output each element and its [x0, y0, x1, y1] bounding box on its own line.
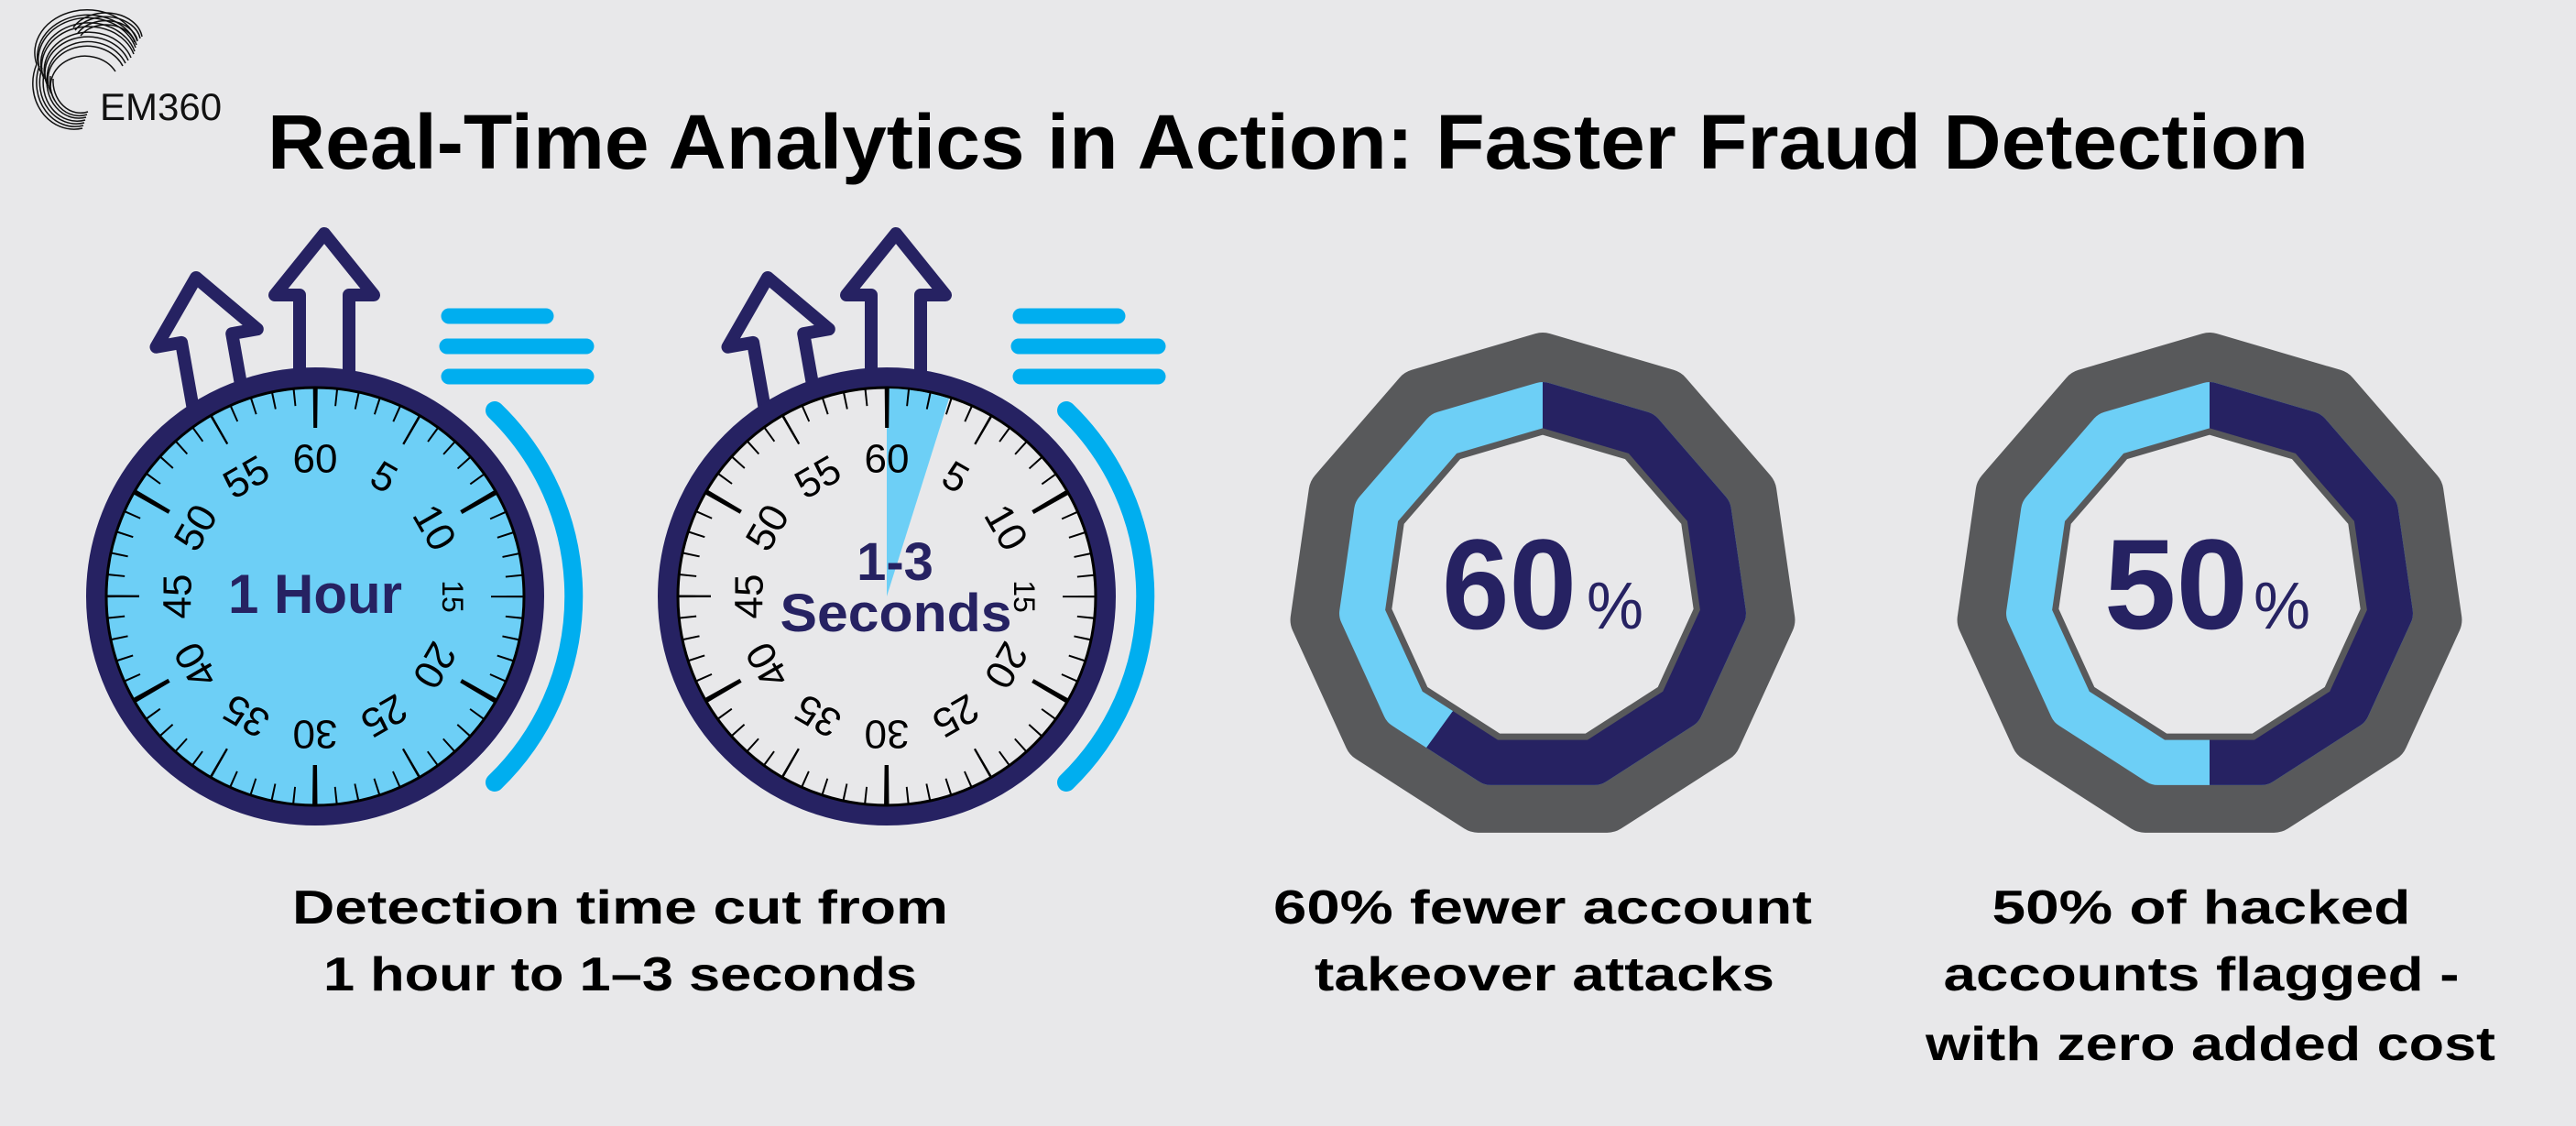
value: 50%: % [2254, 570, 2310, 643]
stopwatch: 1-3 seconds: 50 [737, 497, 799, 558]
icon: arrows [146, 234, 374, 435]
chart: 50% ring [1983, 358, 2436, 807]
label: 1-3 Seconds [780, 532, 1011, 643]
stopwatch: 1-3 seconds: 20 [975, 635, 1036, 695]
caption: detection time: Detection time cut from [292, 881, 948, 935]
stopwatch: 1-3 seconds: 35 [788, 684, 848, 746]
icon: speed lines [1019, 316, 1158, 782]
stopwatch: 1 hour: 25 [354, 684, 414, 746]
stopwatch: 1 hour: 10 [403, 497, 464, 558]
stopwatch: 1 hour: 60 [293, 436, 337, 482]
logo: EM360: EM360 [100, 85, 222, 128]
caption: 50% flagged [1925, 881, 2495, 1071]
stopwatch: 1-3 seconds: 60 [865, 436, 909, 482]
caption: detection time: 1 hour to 1–3 seconds [323, 948, 917, 1001]
stopwatch: 1 hour [96, 234, 586, 815]
chart: 60% ring [1316, 358, 1769, 807]
stopwatch: 1 hour: 50 [166, 497, 227, 558]
stopwatch: 1 hour: 40 [166, 635, 227, 695]
value: 50%: 50 [2104, 512, 2248, 656]
title: Real-Time Analytics in Action: Faster Fraud Detection [267, 99, 2309, 185]
logo: EM360 [33, 10, 222, 129]
caption: 60% fewer [1273, 881, 1812, 1001]
stopwatch: 1 hour: 5 [363, 453, 405, 502]
stopwatch: 1 hour: 30 [293, 711, 337, 757]
stopwatch: 1-3 seconds: 40 [737, 635, 799, 695]
value: 60%: % [1587, 570, 1643, 643]
stopwatch: 1 hour: 45 [156, 574, 200, 618]
stopwatch: 1 hour: 15 [436, 580, 469, 613]
icon: arrows [717, 234, 945, 435]
stopwatch: 1-3 seconds: 25 [925, 684, 986, 746]
stopwatch: 1 hour: 35 [216, 684, 277, 746]
stopwatch: 1-3 seconds: 55 [788, 447, 848, 508]
caption: 60% fewer: 60% fewer account [1273, 881, 1812, 935]
value: 50% [2104, 512, 2310, 656]
label: 1-3 Seconds: Seconds [780, 584, 1012, 643]
stopwatch: 1-3 seconds [668, 234, 1158, 815]
label: 1 Hour: 1 Hour [228, 563, 402, 625]
caption: detection time [292, 881, 948, 1001]
caption: 60% fewer: takeover attacks [1315, 948, 1774, 1001]
icon: speed lines [447, 316, 586, 782]
stopwatch: 1 hour: 20 [403, 635, 464, 695]
stopwatch: 1-3 seconds: 15 [1008, 580, 1041, 613]
stopwatch: 1 hour: 55 [216, 447, 277, 508]
caption: 50% flagged: 50% of hacked [1992, 881, 2411, 935]
caption: 50% flagged: with zero added cost [1925, 1018, 2495, 1071]
stopwatch: 1-3 seconds: 45 [727, 574, 771, 618]
value: 60%: 60 [1442, 512, 1577, 656]
label: 1-3 Seconds: 1-3 [857, 532, 933, 592]
caption: 50% flagged: accounts flagged - [1944, 948, 2459, 1001]
stopwatch: 1-3 seconds: 10 [975, 497, 1036, 558]
stopwatch: 1-3 seconds: 5 [934, 453, 977, 502]
stopwatch: 1-3 seconds: 30 [865, 711, 909, 757]
